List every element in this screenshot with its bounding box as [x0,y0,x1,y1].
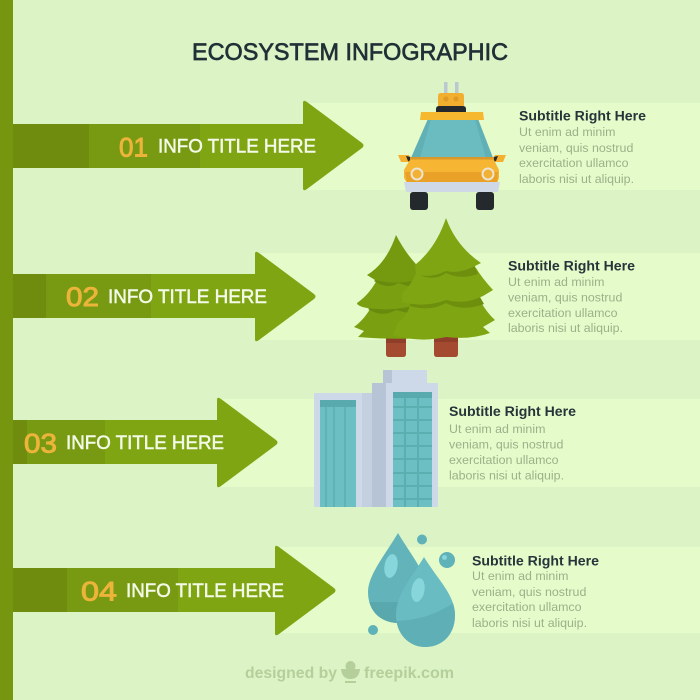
arrow 01: 01 [119,132,148,162]
background strips [220,103,700,633]
text block 2: Subtitle Right Here [508,258,636,274]
text block 3: Subtitle Right Here [449,404,577,419]
text block 1: veniam, quis nostrud [519,141,633,155]
vertical trunk bar [0,0,13,700]
arrow 04 [13,546,336,635]
title: ECOSYSTEM INFOGRAPHIC [192,39,508,66]
text block 2 [508,258,636,335]
text block 4: exercitation ullamco [472,600,582,614]
text block 3: exercitation ullamco [449,453,559,467]
text block 4: Ut enim ad minim [472,569,568,583]
watermark: freepik.com [364,665,454,682]
icon: water drops [368,533,455,647]
arrow 02: 02 [66,282,99,312]
text block 3 [449,404,577,482]
text block 1: exercitation ullamco [519,156,629,170]
arrow 03: INFO TITLE HERE [66,433,224,454]
text block 1: laboris nisi ut aliquip. [519,172,634,186]
text block 2: laboris nisi ut aliquip. [508,321,623,335]
text block 4: Subtitle Right Here [472,554,600,568]
icon: car [398,82,506,210]
arrow 04: 04 [81,576,117,606]
arrow 03: 03 [24,428,57,458]
text block 2: veniam, quis nostrud [508,290,622,304]
text block 2: Ut enim ad minim [508,275,604,289]
arrow 01 [13,101,364,190]
text block 4: veniam, quis nostrud [472,585,586,599]
arrow 03 [13,398,278,487]
icon: trees [354,218,495,357]
text block 1 [519,108,647,186]
text block 4 [472,554,600,630]
watermark [245,661,454,683]
text block 1: Subtitle Right Here [519,108,647,124]
icon: buildings [314,370,438,507]
text block 2: exercitation ullamco [508,306,618,320]
watermark: designed by [245,665,337,682]
text block 3: laboris nisi ut aliquip. [449,468,564,482]
text block 3: veniam, quis nostrud [449,438,563,452]
text block 4: laboris nisi ut aliquip. [472,616,587,630]
arrow 02 [13,252,316,341]
arrow 04: INFO TITLE HERE [126,581,284,602]
arrow 02: INFO TITLE HERE [108,287,267,308]
text block 3: Ut enim ad minim [449,422,545,436]
arrow 01: INFO TITLE HERE [158,136,316,158]
text block 1: Ut enim ad minim [519,125,615,139]
